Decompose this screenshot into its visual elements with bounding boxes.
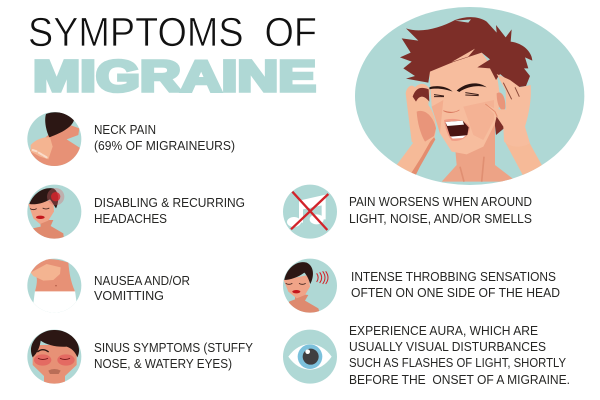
brow and eyes	[37, 350, 49, 352]
text: headaches: DISABLING & RECURRING	[94, 196, 245, 210]
left arm	[397, 137, 435, 175]
text: pain worsens	[349, 195, 532, 226]
sound waves	[317, 271, 328, 284]
text: pain worsens: PAIN WORSENS WHEN AROUND	[349, 195, 532, 209]
text: nausea: NAUSEA AND/OR	[94, 274, 190, 288]
eyes and lips	[30, 208, 49, 210]
title: symptoms of: SYMPTOMS OF	[28, 9, 317, 55]
red cross	[291, 192, 328, 230]
text: nausea: VOMITTING	[94, 289, 164, 303]
mouth	[444, 119, 470, 141]
shoulders	[33, 220, 64, 240]
icon: headache	[27, 185, 81, 240]
text: neck pain: NECK PAIN	[94, 123, 156, 137]
hair	[29, 188, 58, 208]
text: aura: EXPERIENCE AURA, WHICH ARE	[349, 324, 538, 338]
text: pain worsens: LIGHT, NOISE, AND/OR SMELLS	[349, 212, 532, 226]
illustration: woman with migraine	[355, 7, 584, 185]
eyes	[434, 95, 444, 97]
music note	[287, 195, 326, 227]
text: aura: BEFORE THE ONSET OF A MIGRAINE.	[349, 373, 570, 387]
neck and shoulder	[30, 125, 83, 167]
icon: no sound	[283, 185, 337, 239]
text: sinus symptoms: NOSE, & WATERY EYES)	[94, 357, 232, 371]
red eye areas	[34, 354, 51, 366]
eyes and lips	[286, 283, 306, 284]
icon: sinus symptoms	[27, 330, 81, 385]
hand	[31, 264, 61, 281]
hair back	[495, 116, 504, 135]
hair	[31, 330, 79, 357]
text: headaches: HEADACHES	[94, 212, 167, 226]
hair	[400, 17, 532, 87]
text: neck pain	[94, 123, 235, 153]
text: throbbing: OFTEN ON ONE SIDE OF THE HEAD	[351, 286, 560, 300]
face	[429, 53, 501, 154]
text: neck pain: (69% OF MIGRAINEURS)	[94, 139, 235, 153]
text: aura: SUCH AS FLASHES OF LIGHT, SHORTLY	[349, 356, 567, 370]
title: migraine: MIGRAINE	[33, 52, 316, 101]
right hand	[488, 74, 531, 144]
text: throbbing	[351, 270, 560, 300]
ear	[497, 92, 505, 110]
text: sinus symptoms: SINUS SYMPTOMS (STUFFY	[94, 341, 254, 355]
hand	[31, 137, 53, 159]
icon: neck pain	[27, 112, 83, 167]
text: throbbing: INTENSE THROBBING SENSATIONS	[351, 270, 556, 284]
left hand	[406, 84, 436, 151]
text: nausea	[94, 274, 190, 303]
right arm	[506, 142, 542, 175]
text: aura: USUALLY VISUAL DISTURBANCES	[349, 340, 546, 354]
face	[33, 345, 77, 385]
text: aura	[349, 324, 570, 387]
neck and shoulders	[442, 123, 517, 182]
pain glow	[47, 188, 64, 205]
hair	[284, 262, 313, 284]
mouth	[48, 369, 61, 374]
eyebrows	[429, 86, 453, 92]
nose	[443, 110, 459, 113]
icon: eye	[283, 330, 337, 384]
hair	[45, 112, 74, 137]
icon: throbbing head	[283, 259, 337, 313]
text: sinus symptoms	[94, 341, 254, 371]
face	[28, 200, 54, 224]
belly	[31, 259, 75, 291]
icon: nausea	[27, 258, 82, 313]
text: headaches	[94, 196, 245, 226]
